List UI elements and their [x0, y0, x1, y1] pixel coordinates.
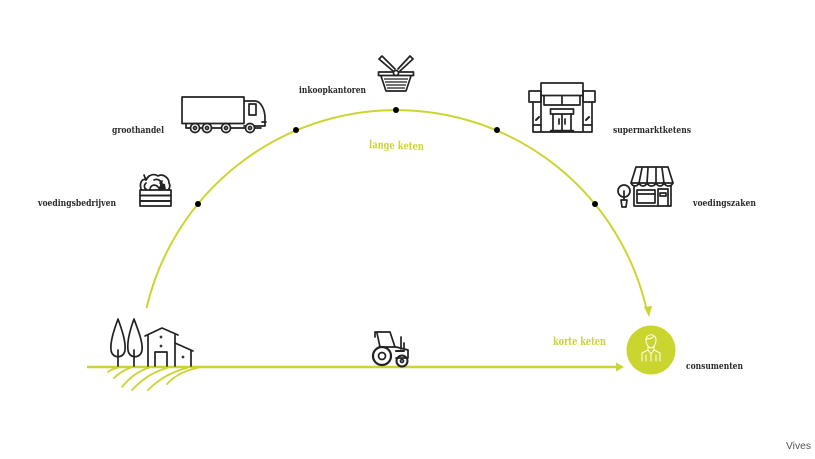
- icon: crate with vegetables: [140, 175, 171, 206]
- label: voedingsbedrijven: voedingsbedrijven: [37, 198, 116, 209]
- icon: tractor: [373, 332, 408, 366]
- label: inkoopkantoren: inkoopkantoren: [299, 85, 366, 96]
- label: supermarktketens: supermarktketens: [613, 125, 691, 136]
- icon: consumer circle: [626, 326, 676, 374]
- icon: shopping basket: [378, 56, 414, 91]
- icon: farm with trees: [111, 319, 193, 366]
- label: korte keten: korte keten: [553, 335, 606, 348]
- line: korte keten arrow: [87, 362, 624, 372]
- icon: food shop with awning and tree: [618, 167, 673, 207]
- credit: Vives: Vives: [786, 440, 811, 452]
- icon: delivery truck: [182, 97, 266, 132]
- label: voedingszaken: voedingszaken: [692, 198, 756, 209]
- arc: lange keten arrow: [146, 110, 652, 317]
- arc stop markers: [195, 107, 598, 207]
- label: groothandel: groothandel: [112, 125, 164, 136]
- label: lange keten: lange keten: [369, 138, 424, 153]
- label: consumenten: consumenten: [686, 361, 743, 372]
- icon: farm field furrows: [108, 368, 197, 390]
- icon: supermarket building: [529, 83, 595, 132]
